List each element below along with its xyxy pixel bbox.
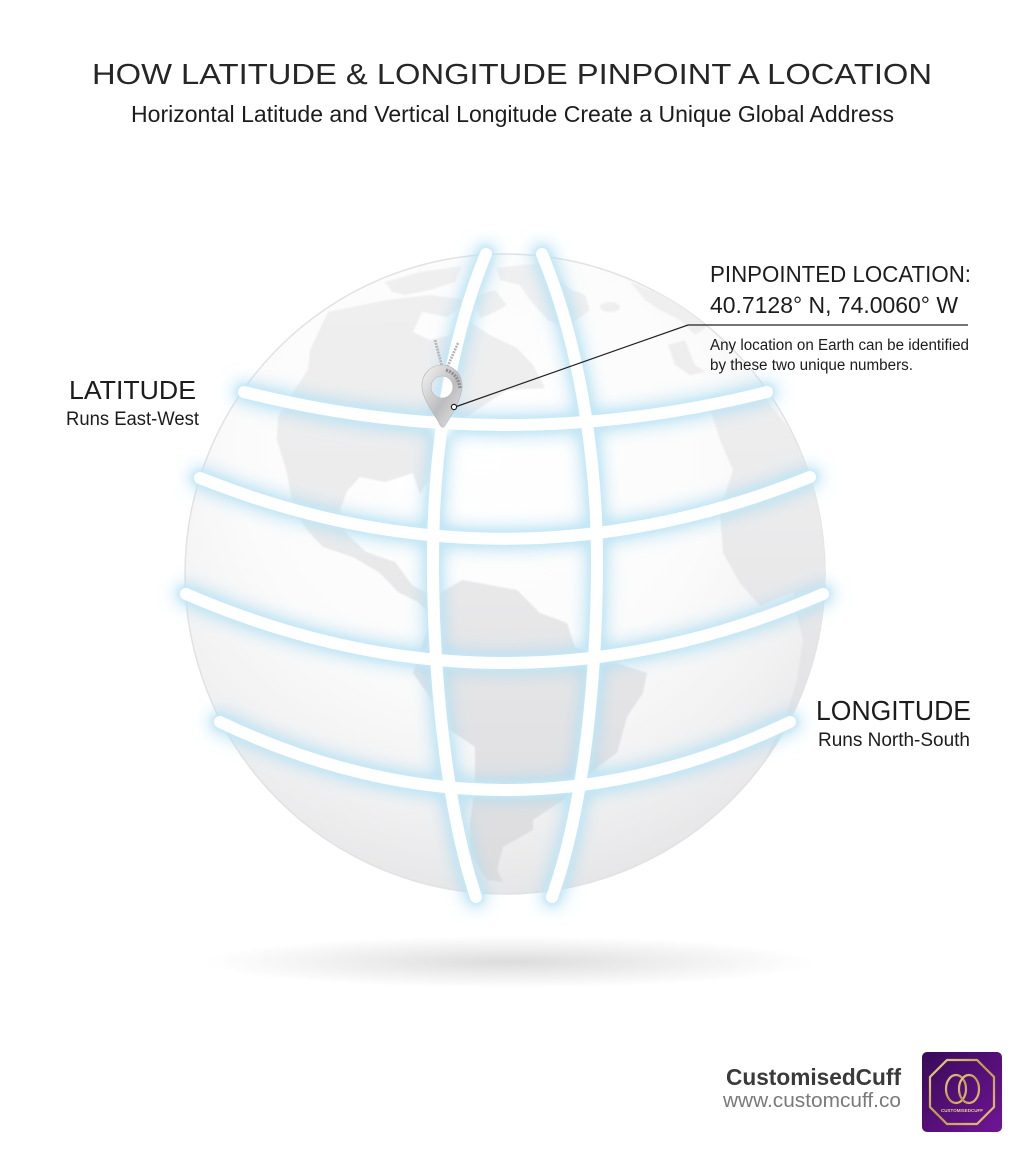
- north america: [277, 295, 545, 612]
- brand name: CustomisedCuff: [726, 1064, 901, 1090]
- grid glow: [186, 254, 823, 897]
- callout: pinpointed location: PINPOINTED LOCATION:: [710, 261, 971, 287]
- brand url: www.customcuff.co: [722, 1090, 901, 1112]
- latitude label: LATITUDE: [69, 375, 196, 405]
- callout: pinpointed location: 40.7128° N, 74.0060° W: [710, 292, 958, 318]
- subtitle: Horizontal Latitude and Vertical Longitude Create a Unique Global Address: [131, 101, 894, 127]
- callout: pinpointed location: [710, 261, 971, 374]
- greenland: [498, 265, 590, 322]
- continents: [277, 262, 835, 882]
- africa: [714, 407, 823, 704]
- logo: [922, 1052, 1002, 1132]
- title: HOW LATITUDE & LONGITUDE PINPOINT A LOCATION: [92, 59, 932, 91]
- longitude label: Runs North-South: [818, 730, 970, 751]
- longitude label: [816, 695, 971, 751]
- europe: [632, 284, 706, 334]
- globe: [185, 254, 835, 894]
- longitude label: LONGITUDE: [816, 695, 971, 726]
- latitude label: Runs East-West: [66, 409, 200, 430]
- longitude lines: [433, 254, 597, 897]
- arctic islands: [385, 266, 462, 295]
- latitude lines: [186, 392, 823, 790]
- callout: pinpointed location: Any location on Earth can be identified: [710, 337, 969, 354]
- callout: pinpointed location: by these two unique numbers.: [710, 357, 913, 374]
- south america: [413, 580, 647, 882]
- ground shadow: [205, 936, 815, 988]
- latitude label: [66, 375, 200, 430]
- iceland: [600, 302, 620, 312]
- leader line: [451, 325, 968, 410]
- icon: location pin: [422, 340, 462, 437]
- logo: CUSTOMISEDCUFF: [941, 1108, 983, 1113]
